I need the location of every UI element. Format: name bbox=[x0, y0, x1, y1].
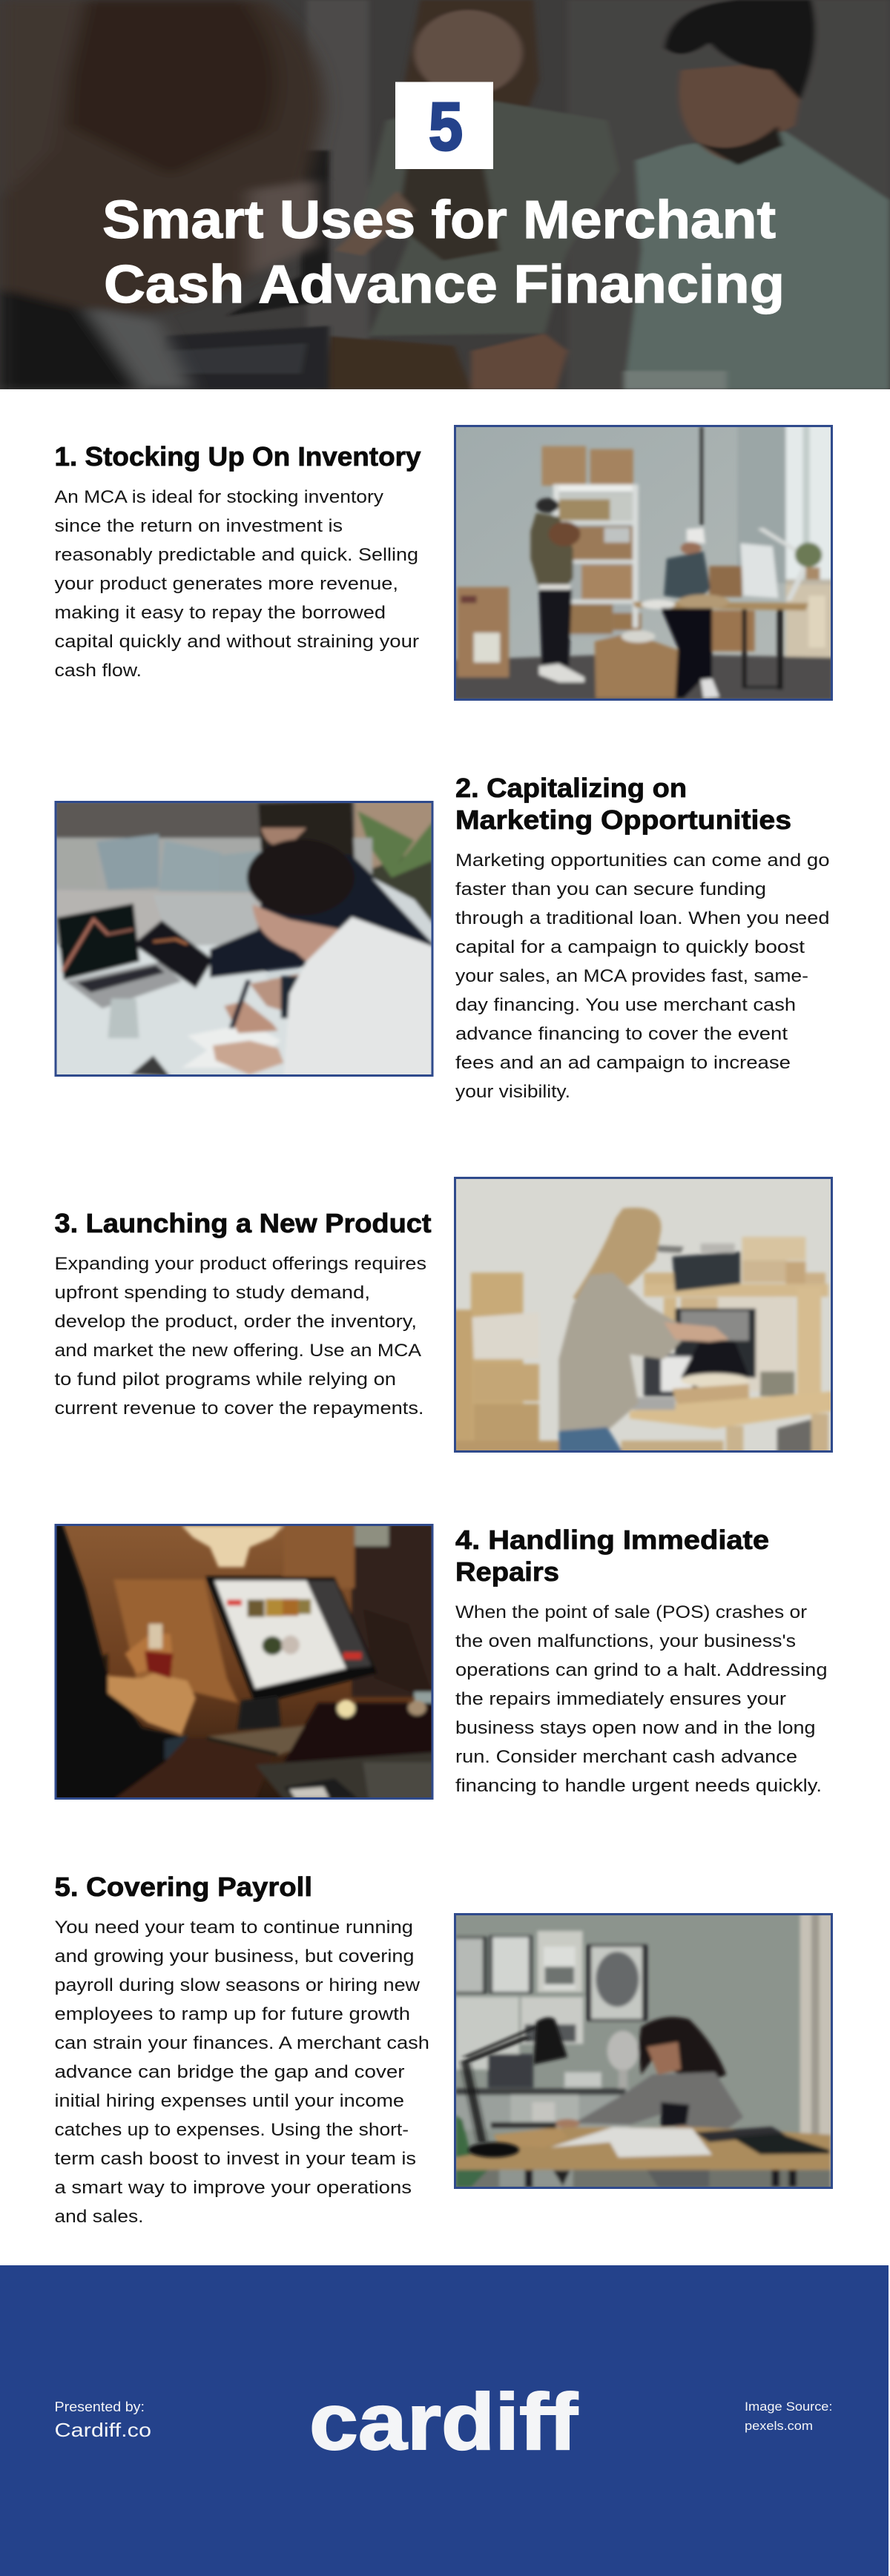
body text 5: payroll during slow seasons or hiring new bbox=[55, 1975, 421, 1995]
photo: restaurant point-of-sale tablet bbox=[55, 1524, 433, 1800]
body text 2: fees and an ad campaign to increase bbox=[455, 1053, 791, 1073]
body text 3: to fund pilot programs while relying on bbox=[55, 1370, 396, 1390]
photo: woman packing shoes among boxes bbox=[454, 1177, 833, 1453]
body text 5: term cash boost to invest in your team is bbox=[55, 2149, 416, 2169]
body text 4: run. Consider merchant cash advance bbox=[455, 1747, 797, 1767]
panel: 1. stocking up on inventory bbox=[55, 425, 833, 701]
image source: pexels.com bbox=[745, 2419, 813, 2433]
number badge bbox=[395, 82, 493, 169]
body text 2: capital for a campaign to quickly boost bbox=[455, 937, 805, 957]
body text 3: current revenue to cover the repayments. bbox=[55, 1398, 424, 1419]
title: Cash Advance Financing bbox=[104, 255, 785, 314]
panel: 5. covering payroll bbox=[55, 1872, 833, 2227]
body text 3: upfront spending to study demand, bbox=[55, 1283, 370, 1303]
body text 2: Marketing opportunities can come and go bbox=[455, 851, 829, 871]
footer bbox=[0, 2265, 889, 2576]
body text 5: advance can bridge the gap and cover bbox=[55, 2062, 405, 2082]
body text 2: day financing. You use merchant cash bbox=[455, 995, 796, 1015]
body text 3: and market the new offering. Use an MCA bbox=[55, 1341, 421, 1361]
body text 5: and sales. bbox=[55, 2207, 144, 2227]
body text 1: An MCA is ideal for stocking inventory bbox=[55, 487, 383, 507]
body text 4 bbox=[455, 1602, 828, 1796]
body text 5: and growing your business, but covering bbox=[55, 1946, 414, 1966]
body text 4: financing to handle urgent needs quickly. bbox=[455, 1776, 822, 1796]
body text 1: making it easy to repay the borrowed bbox=[55, 603, 386, 623]
body text 1: reasonably predictable and quick. Selling bbox=[55, 545, 418, 565]
presented by: Cardiff.co bbox=[55, 2419, 151, 2441]
number badge: 5 bbox=[429, 89, 463, 165]
body text 5: You need your team to continue running bbox=[55, 1918, 413, 1938]
body text 4: the repairs immediately ensures your bbox=[455, 1689, 786, 1709]
heading 2 bbox=[455, 773, 791, 835]
body text 5: catches up to expenses. Using the short- bbox=[55, 2120, 409, 2140]
body text 1: since the return on investment is bbox=[55, 516, 343, 536]
body text 4: When the point of sale (POS) crashes or bbox=[455, 1602, 807, 1622]
image source: Image Source: bbox=[745, 2400, 832, 2414]
body text 2: faster than you can secure funding bbox=[455, 879, 766, 899]
panel: 4. handling immediate repairs bbox=[55, 1524, 828, 1800]
body text 5: can strain your finances. A merchant cash bbox=[55, 2033, 429, 2053]
heading 2: Marketing Opportunities bbox=[455, 805, 791, 835]
panel: 3. launching a new product bbox=[55, 1177, 833, 1453]
heading 4 bbox=[455, 1525, 769, 1587]
heading 4: 4. Handling Immediate bbox=[455, 1525, 769, 1555]
heading 3: 3. Launching a New Product bbox=[55, 1208, 432, 1238]
body text 4: the oven malfunctions, your business's bbox=[455, 1631, 796, 1651]
hero header bbox=[0, 0, 890, 389]
presented by bbox=[55, 2400, 151, 2441]
body text 2: your visibility. bbox=[455, 1082, 570, 1102]
photo: men reviewing charts on laptop bbox=[55, 801, 433, 1077]
heading 4: Repairs bbox=[455, 1556, 559, 1587]
body text 3: develop the product, order the inventory, bbox=[55, 1312, 417, 1332]
photo: warehouse workers with boxes bbox=[454, 425, 833, 701]
body text 5 bbox=[55, 1918, 429, 2227]
body text 2: through a traditional loan. When you need bbox=[455, 908, 829, 928]
body text 4: business stays open now and in the long bbox=[455, 1718, 816, 1738]
body text 2: your sales, an MCA provides fast, same- bbox=[455, 966, 808, 986]
heading 5: 5. Covering Payroll bbox=[55, 1872, 312, 1902]
presented by: Presented by: bbox=[55, 2400, 145, 2414]
title: Smart Uses for Merchant bbox=[102, 191, 776, 250]
title bbox=[102, 191, 785, 314]
photo: woman working at a desk bbox=[454, 1913, 833, 2189]
hero photo with dark overlay bbox=[0, 0, 890, 389]
logo: cardiff wordmark: cardiff bbox=[309, 2377, 578, 2466]
body text 3: Expanding your product offerings requires bbox=[55, 1254, 426, 1274]
body text 2 bbox=[455, 851, 829, 1102]
body text 3 bbox=[55, 1254, 426, 1419]
heading 2: 2. Capitalizing on bbox=[455, 773, 687, 803]
heading 1: 1. Stocking Up On Inventory bbox=[55, 441, 421, 472]
body text 1: cash flow. bbox=[55, 661, 142, 681]
body text 1 bbox=[55, 487, 419, 681]
body text 1: your product generates more revenue, bbox=[55, 574, 398, 594]
panel: 2. capitalizing on marketing opportunities bbox=[55, 773, 829, 1102]
body text 5: a smart way to improve your operations bbox=[55, 2178, 412, 2198]
body text 5: employees to ramp up for future growth bbox=[55, 2004, 410, 2024]
image source bbox=[745, 2400, 832, 2433]
footer band bbox=[0, 2265, 889, 2576]
body text 5: initial hiring expenses until your income bbox=[55, 2091, 404, 2111]
body text 4: operations can grind to a halt. Addressing bbox=[455, 1660, 828, 1680]
body text 1: capital quickly and without straining your bbox=[55, 632, 419, 652]
body text 2: advance financing to cover the event bbox=[455, 1024, 788, 1044]
